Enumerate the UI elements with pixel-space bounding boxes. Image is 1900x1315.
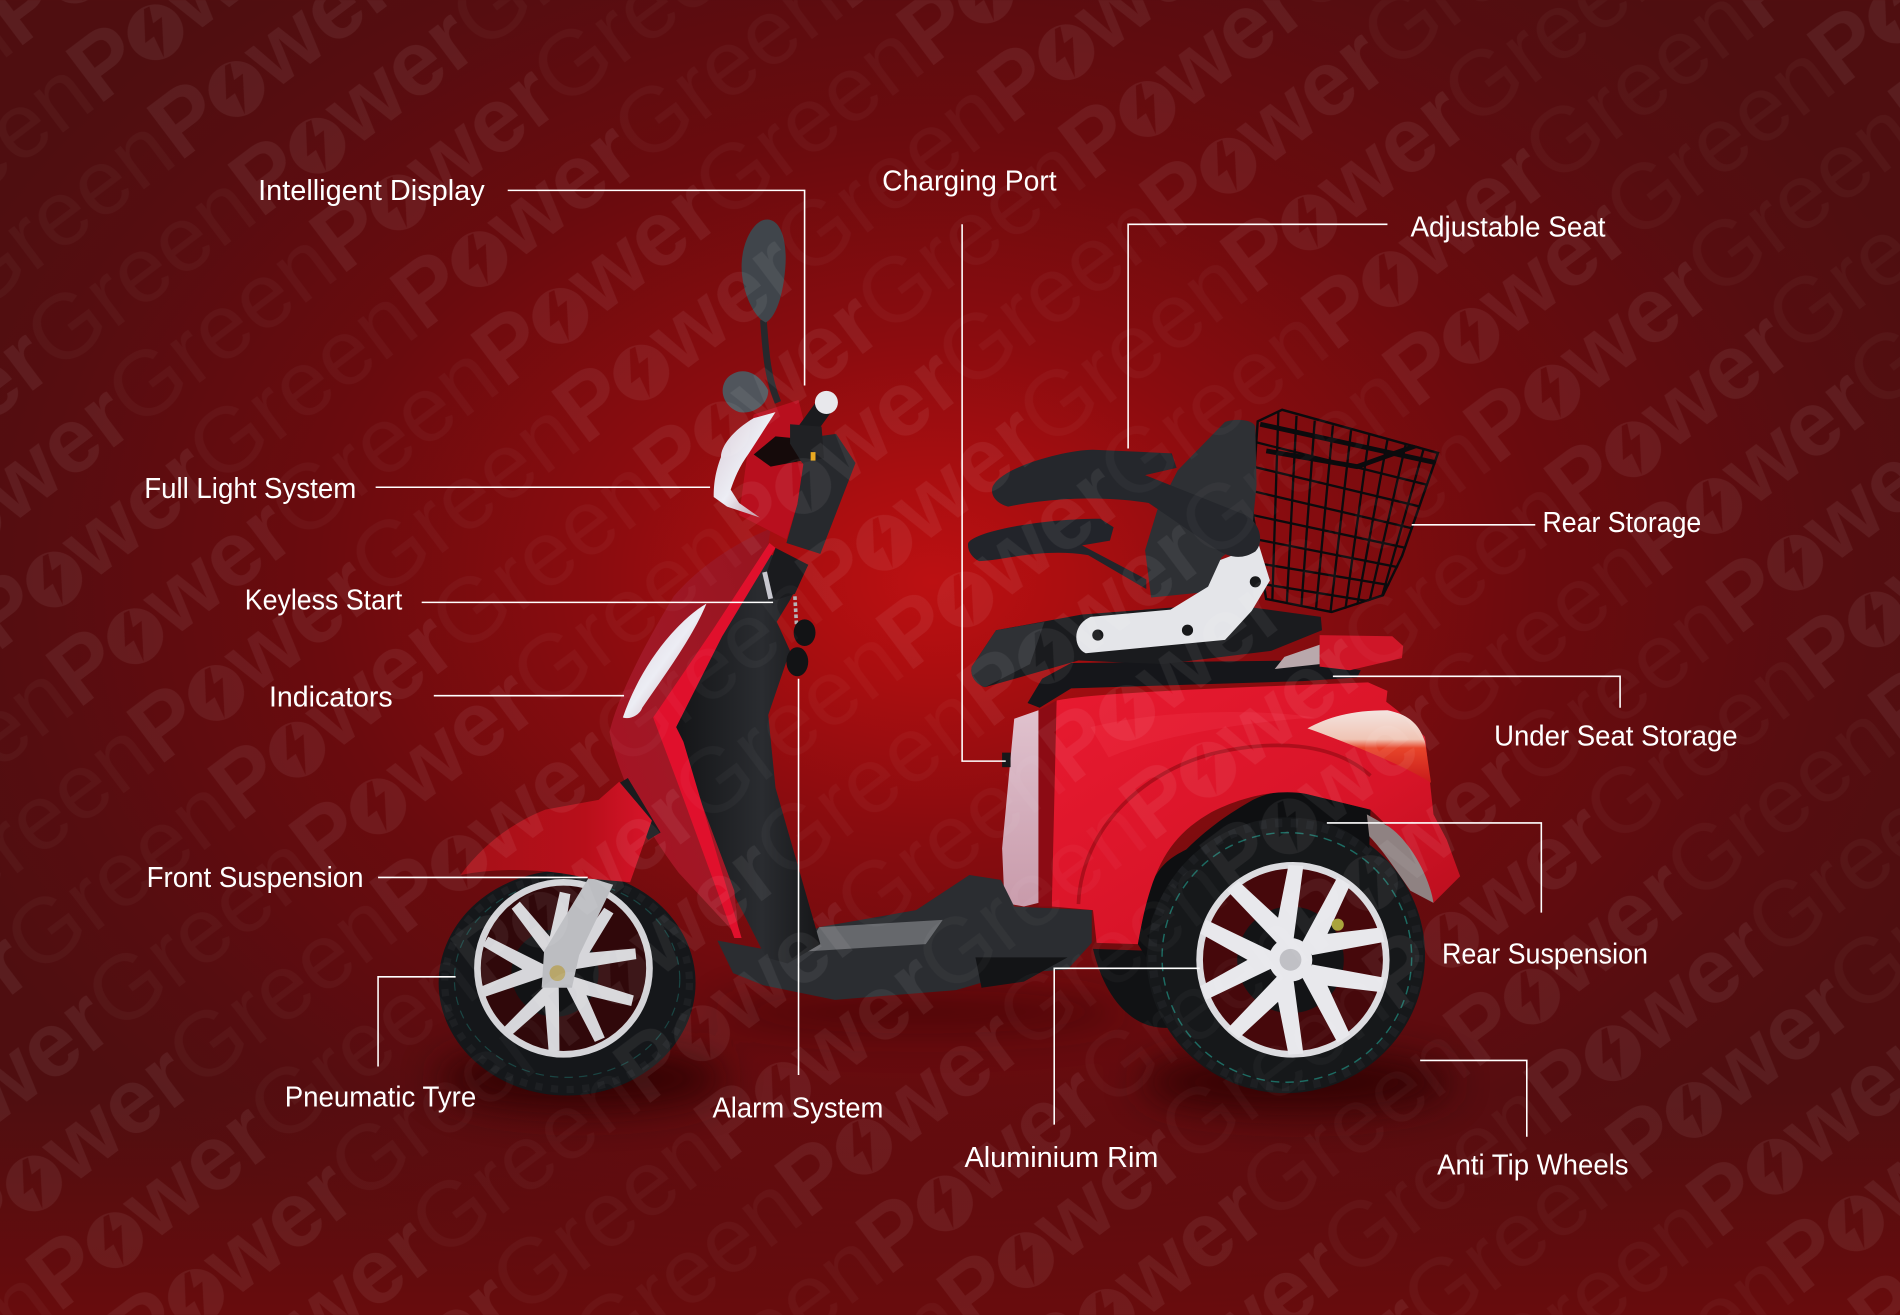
rear lamp — [1307, 710, 1431, 783]
ignition and keys — [763, 548, 815, 676]
main mirror — [742, 219, 786, 322]
callout: Full Light System: Full Light System — [144, 473, 356, 505]
bottom glow — [0, 1091, 1900, 1315]
fender arch crease — [1078, 745, 1370, 904]
rear grey reflector under fender — [1367, 814, 1433, 903]
callout: Charging Port: Charging Port — [882, 165, 1057, 197]
footboard deck — [768, 920, 943, 954]
footboard — [717, 875, 1092, 1000]
dark wheel arch interior — [1138, 792, 1370, 957]
front wheel — [439, 870, 696, 1096]
rear anti tip wheel — [1093, 949, 1169, 1028]
lower armrest — [968, 519, 1146, 589]
underside frame — [975, 957, 1068, 988]
bright shield stripe — [653, 543, 776, 938]
scooter — [439, 219, 1460, 1096]
bracket bolts — [1092, 576, 1261, 641]
dark panel seam — [1038, 701, 1057, 907]
callout: Alarm System: Alarm System — [713, 1092, 883, 1124]
seat rails — [1028, 661, 1361, 708]
seat cushion — [971, 604, 1322, 687]
cushion front shade — [971, 622, 1045, 687]
rear body — [1049, 682, 1460, 944]
glossy highlight — [1091, 712, 1315, 757]
white side panel — [1002, 710, 1038, 907]
front fender — [460, 782, 652, 882]
seat backrest — [1145, 420, 1257, 598]
callout: Charging Port — [882, 165, 1057, 761]
callout: Rear Storage: Rear Storage — [1543, 507, 1701, 539]
charging port clip — [1002, 753, 1011, 767]
headlight — [714, 412, 776, 518]
callout: Pneumatic Tyre — [285, 977, 476, 1113]
front fork — [542, 877, 613, 988]
callout: Anti Tip Wheels — [1420, 1060, 1629, 1181]
callout: Adjustable Seat — [1128, 211, 1606, 448]
upper fork — [622, 782, 654, 836]
front axle nut — [550, 965, 565, 981]
callout: Intelligent Display — [258, 175, 805, 385]
white seat bracket — [1076, 545, 1270, 653]
callout: Aluminium Rim — [965, 968, 1200, 1174]
callout: Rear Suspension: Rear Suspension — [1442, 938, 1648, 970]
black leg shield — [674, 554, 820, 963]
callout: Under Seat Storage — [1333, 676, 1738, 752]
head unit black rear — [786, 434, 855, 554]
front shield — [610, 528, 771, 938]
callout: Rear Suspension — [1327, 823, 1648, 970]
second mirror — [723, 371, 768, 413]
callout: Under Seat Storage: Under Seat Storage — [1494, 720, 1738, 752]
ground shadow — [436, 990, 1454, 1111]
callout: Aluminium Rim: Aluminium Rim — [965, 1142, 1158, 1174]
upper armrest — [992, 450, 1260, 557]
callout: Anti Tip Wheels: Anti Tip Wheels — [1437, 1149, 1629, 1181]
handlebar recess — [754, 436, 802, 467]
handlebar grip — [806, 405, 825, 432]
storage basket — [1251, 408, 1440, 613]
indicator lens — [623, 604, 706, 718]
yellow indicator — [811, 452, 815, 461]
rear wheel — [1146, 817, 1425, 1093]
rear rack — [1320, 635, 1403, 670]
callout: Pneumatic Tyre: Pneumatic Tyre — [285, 1081, 476, 1113]
callout: Front Suspension: Front Suspension — [147, 862, 364, 894]
callout: Keyless Start: Keyless Start — [245, 585, 402, 617]
head unit red — [739, 400, 805, 539]
switch block — [790, 424, 824, 463]
rear chrome detail — [1275, 645, 1320, 669]
callout: Indicators: Indicators — [269, 682, 393, 714]
handlebar chrome cap — [815, 391, 838, 414]
callout: Intelligent Display: Intelligent Display — [258, 175, 485, 207]
mirror stem — [763, 320, 778, 402]
callout: Adjustable Seat: Adjustable Seat — [1410, 211, 1606, 243]
